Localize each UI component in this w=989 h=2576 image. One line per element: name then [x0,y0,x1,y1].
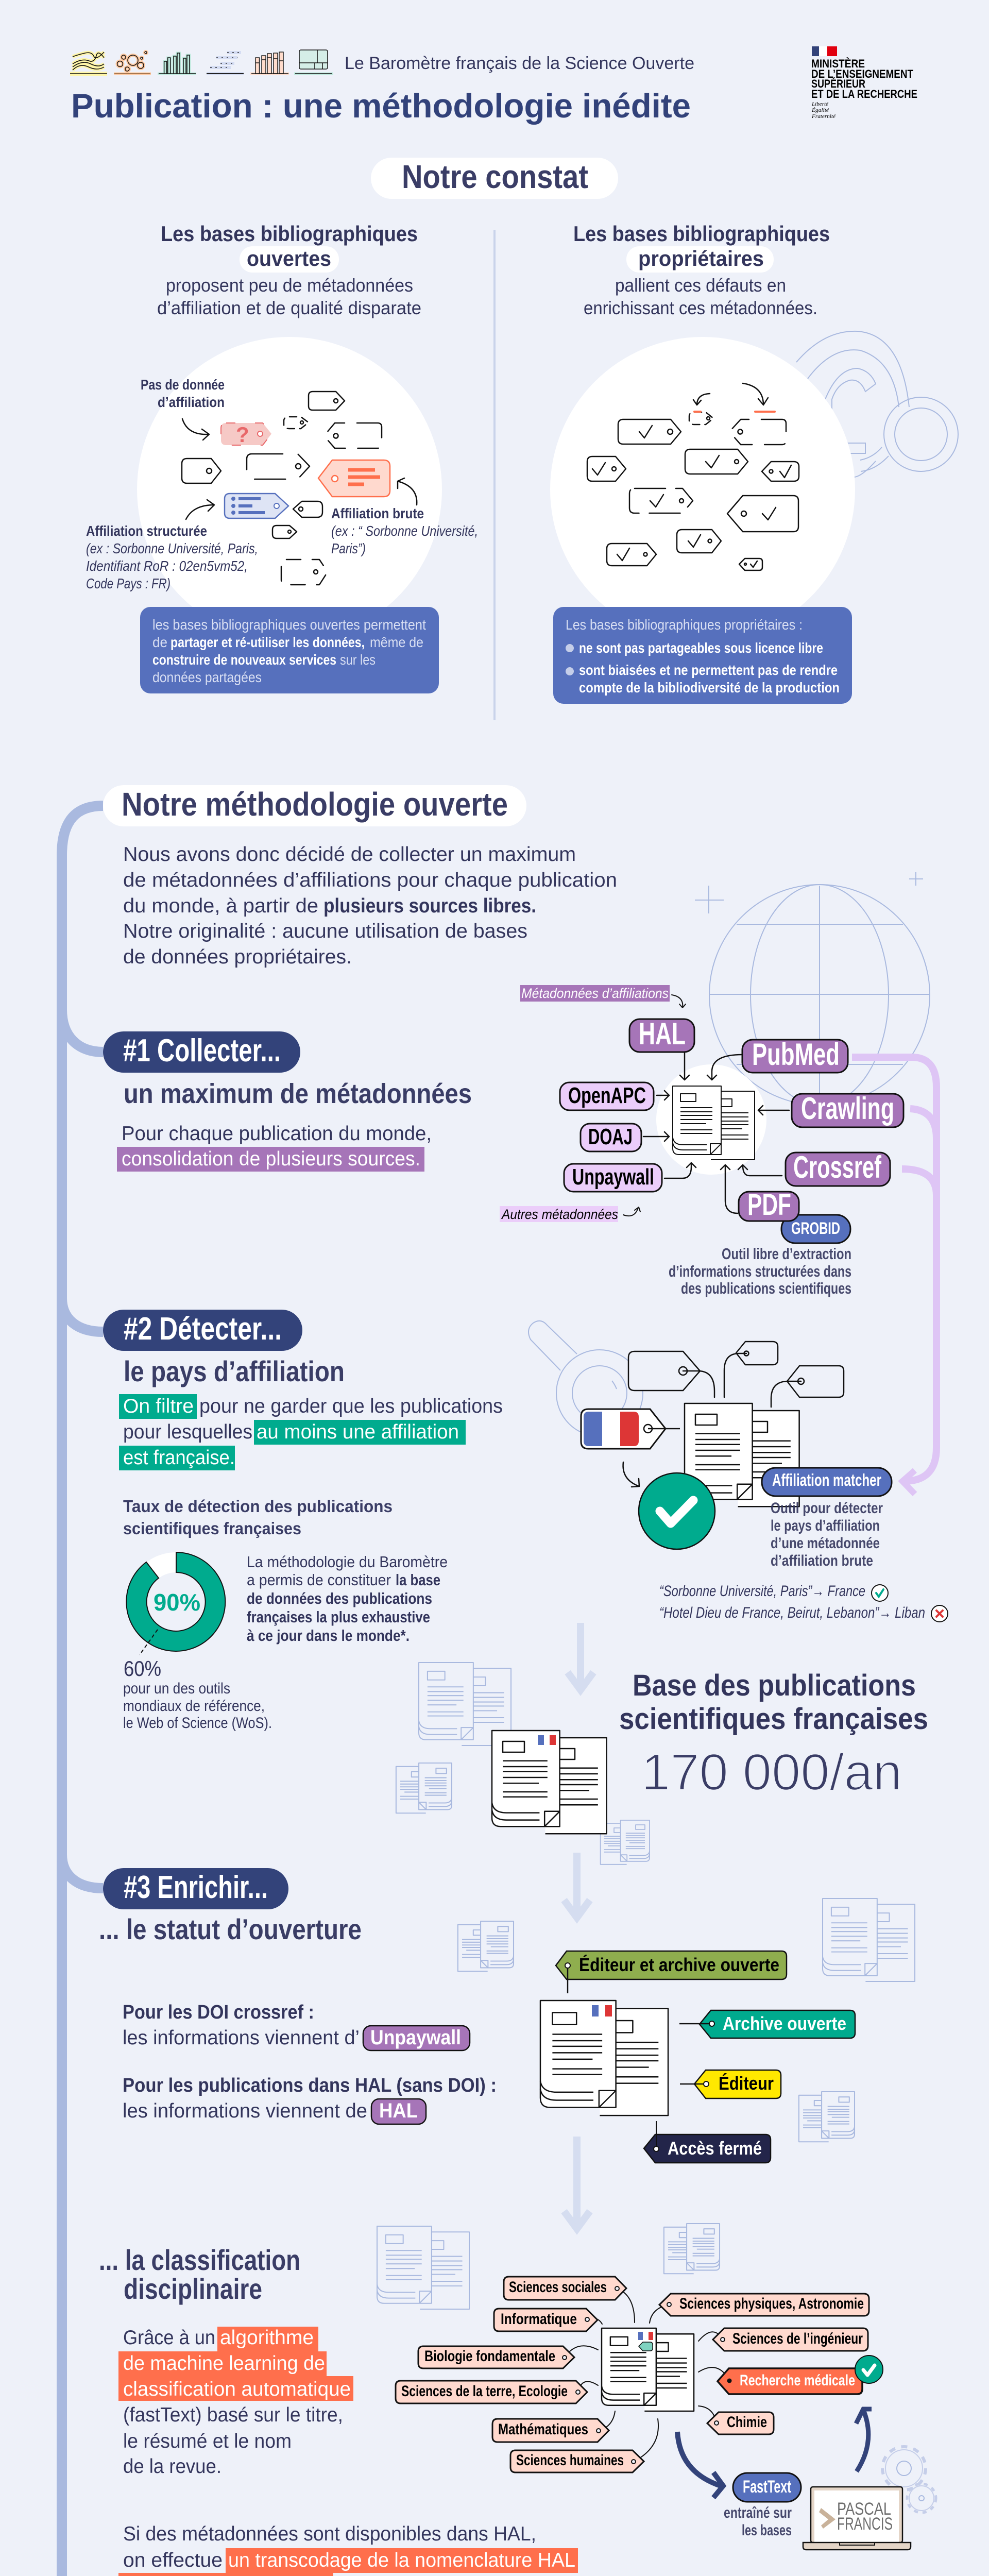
document [685,1403,799,1506]
source: Unpaywall [564,1164,662,1192]
classification heading [99,2244,300,2305]
red question tag [221,422,271,447]
step 1 text: consolidation de plusieurs sources. [122,1148,420,1170]
ministry logo: MINISTÈRE [811,57,865,70]
step 2 text: On filtre [123,1395,194,1417]
FastText caption: les bases [742,2522,792,2539]
document [602,2328,694,2411]
panel: open bibliographic databases heading: Les bases bibliographiques [161,222,418,246]
panel: open bibliographic databases heading: proposent peu de métadonnées [166,275,413,296]
panel: proprietary databases heading: Les bases bibliographiques [573,222,830,246]
white circle: open [137,337,442,642]
laptop: PASCAL FRANCIS: FRANCIS [837,2514,893,2534]
arrow: to FastText [677,2432,723,2498]
flag and tag on document [638,2332,653,2351]
classification text: (fastText) basé sur le titre, [123,2404,343,2426]
step 2 text [119,1394,503,1470]
panel: open bibliographic databases heading: ouvertes [247,246,331,270]
French flag tag [581,1409,680,1449]
intro text: Notre originalité : aucune utilisation de bases [123,920,527,942]
transcoding text: Si des métadonnées sont disponibles dans HAL, [123,2523,536,2545]
tag: Recherche médicale: Recherche médicale [740,2372,855,2389]
GROBID caption: d’informations structurées dans [669,1262,851,1280]
diagram: open status [540,1951,855,2163]
tag: open archive: Archive ouverte [723,2013,846,2034]
tool: GROBID: GROBID [791,1219,840,1238]
tag: Sciences physiques, Astronomie: Sciences physiques, Astronomie [679,2295,864,2312]
callout: proprietary databases: Les bases bibliographiques propriétaires : [566,617,803,633]
tag: Mathématiques [492,2419,609,2442]
green check badge [855,2355,883,2383]
header subtitle: Le Baromètre français de la Science Ouverte [345,54,694,73]
flag [592,2005,612,2016]
blue structured tag [225,494,288,518]
FastText caption: entraîné sur [724,2504,792,2521]
diagram: disciplinary classification [396,2277,936,2550]
title: Publication : une méthodologie inédite [71,87,691,125]
open status text: HAL [379,2099,418,2122]
source: HAL: HAL [639,1016,686,1051]
source: DOAJ [581,1124,641,1151]
red question tag: ? [236,422,249,447]
tag: Sciences physiques, Astronomie [659,2294,869,2316]
document [540,2001,668,2115]
label: affiliation metadata: Métadonnées d’affiliations [521,986,669,1001]
decoration: magnifier [528,1321,643,1436]
tag: Biologie fondamentale [418,2346,574,2368]
ministry logo: Égalité [811,107,829,113]
header icons [70,50,333,74]
source: Crossref: Crossref [793,1150,882,1184]
heading pill: Notre constat: Notre constat [402,158,588,195]
tag: Sciences sociales [504,2277,626,2300]
donut description: françaises la plus exhaustive [247,1608,430,1626]
step 1 subtitle: un maximum de métadonnées [124,1078,472,1109]
detection rate heading [123,1497,393,1538]
panel: proprietary databases heading [573,222,830,318]
ministry logo: ET DE LA RECHERCHE [811,88,917,100]
donut description: La méthodologie du Baromètre [247,1553,448,1571]
tag: closed access: Accès fermé [668,2138,762,2159]
illustration: open database tags [86,377,478,591]
60% note: pour un des outils [123,1680,230,1697]
donut description: a permis de constituer [247,1571,391,1589]
classification heading: ... la classification [99,2244,300,2276]
classification text: classification automatique [123,2378,351,2400]
tool caption: le pays d’affiliation [771,1517,880,1534]
tool caption [771,1500,883,1569]
arrow [623,1207,640,1216]
source: OpenAPC: OpenAPC [568,1083,646,1108]
source: Crossref [786,1150,890,1186]
blank tags with strings [628,1342,844,1407]
open status text: Pour les DOI crossref : [123,2002,314,2023]
decoration: target rings [796,331,958,477]
step 3 subtitle: ... le statut d’ouverture [99,1913,362,1945]
classification heading: disciplinaire [124,2273,262,2305]
ministry logo: Liberté [811,101,829,107]
tag: Sciences de l'ingénieur [713,2328,868,2351]
GROBID caption: Outil libre d’extraction [722,1245,851,1263]
classification text: de la revue. [123,2455,221,2478]
step 2 text: pour ne garder que les publications [199,1395,503,1417]
tool: FastText [733,2473,801,2502]
decoration: globe [695,872,930,1105]
transcoding text: on effectue [123,2549,223,2571]
arrow: pale down 1 [568,1623,593,1690]
panel: proprietary databases heading: propriétaires [638,246,764,270]
tag: Sciences de la terre, Ecologie [396,2381,587,2403]
60% note: mondiaux de référence, [123,1698,265,1715]
transcoding text [118,2523,578,2576]
stat: base des publications: 170 000/an [641,1743,902,1801]
strings [565,2289,729,2462]
callout: proprietary databases [553,607,852,704]
donut chart: 90% [126,1552,226,1655]
callout: open databases: les bases bibliographiques ouvertes permettent [152,617,426,633]
callout: open databases: données partagées [152,669,262,685]
arrow [182,419,209,440]
GROBID caption: des publications scientifiques [681,1279,851,1297]
label: raw affiliation: Affiliation brute [331,505,424,521]
source: Unpaywall: Unpaywall [572,1164,654,1190]
green check [639,1473,715,1549]
intro text: du monde, à partir de [123,895,318,917]
tag: Biologie fondamentale: Biologie fondamentale [424,2348,555,2365]
classification text: Grâce à un [123,2327,215,2349]
intro text: Nous avons donc décidé de collecter un maximum [123,843,576,866]
tool: Affiliation matcher [762,1468,892,1496]
label: no affiliation: d’affiliation [158,394,225,410]
arrow to structured tag [186,500,214,519]
stat: base des publications: scientifiques françaises [619,1702,928,1736]
tag: Chimie [707,2412,774,2434]
open status text: Unpaywall [370,2026,461,2049]
arrow to raw tag [398,478,417,505]
donut description: la base [396,1571,440,1589]
callout: open databases: sur les [340,652,376,668]
decoration: gears [882,2447,936,2513]
tag: Sciences humaines [510,2450,644,2472]
callout: open databases: de [152,634,167,650]
arrow [672,995,686,1008]
donut description [247,1553,448,1645]
tag: publisher [680,2070,781,2098]
source: PubMed: PubMed [752,1037,840,1072]
callout: open databases [140,607,439,693]
flag [538,1735,556,1745]
tag: Sciences de l'ingénieur: Sciences de l’ingénieur [732,2330,863,2347]
intro text [123,843,617,968]
laptop: PASCAL FRANCIS [803,2487,911,2550]
open status text [123,2002,497,2124]
label: no affiliation: Pas de donnée [141,377,225,393]
donut chart: 90%: 90% [154,1589,200,1616]
arrow [623,1462,639,1487]
example: valid: “Sorbonne Université, Paris”→ France [659,1583,865,1600]
source: PDF: PDF [747,1188,791,1222]
laptop: PASCAL FRANCIS: PASCAL [837,2499,891,2519]
detection rate heading: scientifiques françaises [123,1519,301,1538]
classification text: de machine learning de [123,2352,325,2375]
panel: proprietary databases heading: enrichissant ces métadonnées. [584,297,817,318]
step pill: #2: #2 Détecter... [124,1311,282,1347]
step 1 text: Pour chaque publication du monde, [122,1123,432,1145]
60% note: le Web of Science (WoS). [123,1715,272,1732]
tag: Mathématiques: Mathématiques [498,2421,588,2438]
tool caption: d’une métadonnée [771,1535,880,1552]
label: structured affiliation: (ex : Sorbonne Université, Paris, [86,540,258,556]
tag: Sciences sociales: Sciences sociales [509,2279,607,2296]
tag: Informatique: Informatique [501,2311,577,2328]
intro text: de métadonnées d’affiliations pour chaque publication [123,869,617,891]
label: other metadata: Autres métadonnées [501,1207,618,1222]
label: raw affiliation: Paris”) [331,540,366,556]
transcoding text: un transcodage de la nomenclature HAL [228,2549,575,2571]
source: Crawling: Crawling [801,1091,894,1126]
arrows [643,1052,789,1213]
tool caption: d’affiliation brute [771,1552,873,1569]
ministry logo [811,46,917,120]
label: raw affiliation: (ex : “ Sorbonne Université, [331,523,478,539]
stat: base des publications: Base des publications [633,1669,916,1702]
arrow: pale down 3 [564,2137,590,2229]
panel: proprietary databases heading: pallient ces défauts en [615,275,786,296]
detection rate heading: Taux de détection des publications [123,1497,393,1516]
label: raw affiliation [331,505,478,556]
tag: Informatique [494,2309,598,2331]
callout: open databases: construire de nouveaux services [152,652,336,668]
timeline rail [62,806,103,2576]
callout: open databases: partager et ré-utiliser les données, [170,634,365,650]
tag: closed access [644,2121,771,2163]
callout: proprietary databases: ne sont pas partageables sous licence libre [579,640,823,656]
step pill: #1 [103,1031,300,1073]
step 2 text: au moins une affiliation [257,1421,459,1443]
diagram: sources of metadata [500,985,903,1297]
open status text: les informations viennent d’ [123,2027,360,2049]
tag: Chimie: Chimie [727,2414,767,2431]
intro text: de données propriétaires. [123,946,352,968]
step 2 subtitle: le pays d’affiliation [124,1355,345,1387]
tool: FastText: FastText [743,2477,791,2497]
base of publications illustration [396,1663,650,1865]
panel: open bibliographic databases heading [157,222,421,318]
60% note [123,1656,272,1732]
label: no affiliation [141,377,225,410]
orange raw affiliation tag [318,460,390,497]
label: structured affiliation: Identifiant RoR : 02en5vm52, [86,558,248,574]
tag: Recherche médicale [718,2368,862,2394]
callout: proprietary databases: compte de la bibliodiversité de la production [579,680,840,696]
step pill: #3: #3 Enrichir... [124,1870,268,1905]
label: structured affiliation [86,523,258,591]
60% note: 60% [124,1656,161,1681]
tool caption: Outil pour détecter [771,1500,883,1517]
blank tags [182,392,382,585]
callout: open databases: même de [370,634,423,650]
white circle behind doc [656,1064,766,1175]
classification text: algorithme [220,2327,314,2349]
open status text: les informations viennent de [123,2100,367,2122]
tag: open archive [679,2010,855,2038]
illustration: proprietary tags with checks [587,383,799,570]
open status text: Pour les publications dans HAL (sans DOI) : [123,2075,497,2096]
FastText caption [724,2504,792,2539]
tag: publisher: Éditeur [719,2073,774,2094]
source: OpenAPC [560,1082,654,1110]
step pill: #1: #1 Collecter... [123,1033,281,1069]
arrow: to medical research [856,2409,872,2471]
ministry logo: Fraternité [811,113,836,120]
callout: proprietary databases: sont biaisées et ne permettent pas de rendre [579,662,838,678]
tag: publisher and open archive: Éditeur et archive ouverte [579,1954,779,1975]
donut description: de données des publications [247,1589,432,1607]
column divider [493,230,496,720]
example: rejected: “Hotel Dieu de France, Beirut, Lebanon”→ Liban [659,1604,925,1621]
heading pill: Notre méthodologie ouverte: Notre méthodologie ouverte [122,786,508,823]
classification text: le résumé et le nom [123,2430,292,2452]
pale documents [396,1663,650,1865]
main document [492,1731,607,1834]
label: structured affiliation: Affiliation structurée [86,523,207,539]
GROBID caption [669,1245,851,1297]
classification text [118,2327,353,2478]
step pill: #3 [103,1868,288,1909]
step 1 text [117,1123,432,1172]
tag: publisher and open archive [556,1951,787,1993]
pale documents [458,1899,915,2142]
pale documents [377,2224,720,2309]
documents [673,1086,755,1160]
ministry logo: SUPÉRIEUR [811,77,865,90]
white circle: proprietary [550,337,855,642]
source: DOAJ: DOAJ [588,1124,633,1149]
tag: Sciences de la terre, Ecologie: Sciences de la terre, Ecologie [401,2383,568,2400]
arrow: pale down 2 [564,1853,590,1918]
stat: base des publications [619,1669,928,1801]
diagram: affiliation detection [528,1321,948,1622]
tool: Affiliation matcher: Affiliation matcher [772,1470,881,1489]
step 2 text: pour lesquelles [123,1421,252,1443]
step 2 text: est française. [123,1447,235,1469]
label: structured affiliation: Code Pays : FR) [86,575,170,591]
ministry logo: DE L’ENSEIGNEMENT [811,67,913,80]
donut description: à ce jour dans le monde*. [247,1626,410,1645]
intro text: plusieurs sources libres. [323,895,536,917]
tag: Sciences humaines: Sciences humaines [516,2452,624,2469]
purple flow line to affiliation matcher [852,1057,936,1494]
tool: GROBID [781,1215,850,1243]
panel: open bibliographic databases heading: d’affiliation et de qualité disparate [157,297,421,318]
